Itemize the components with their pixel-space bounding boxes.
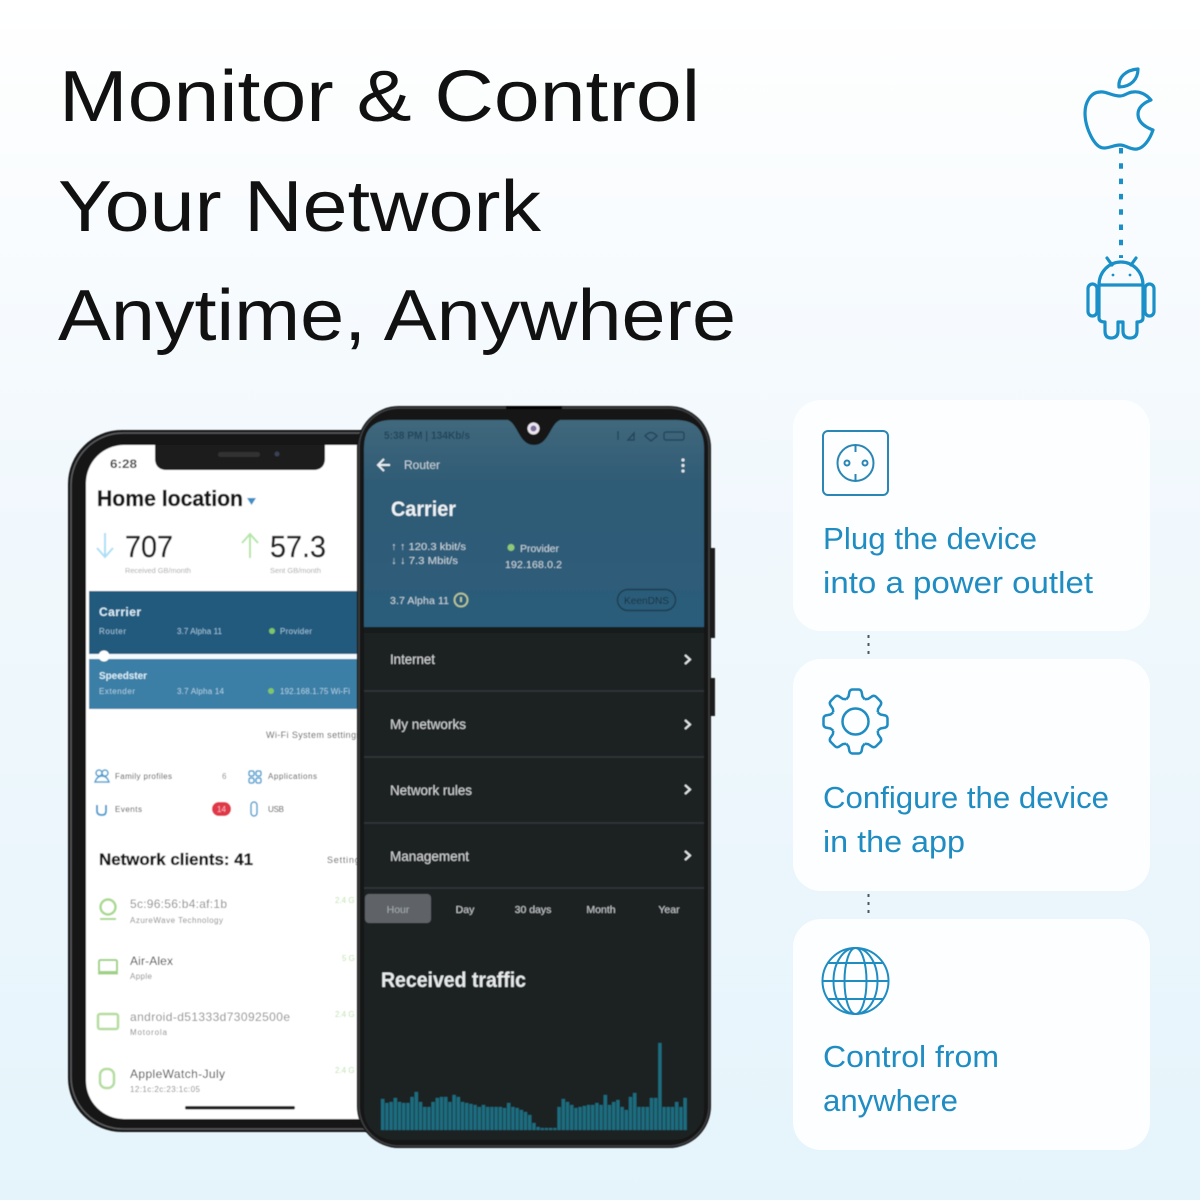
status bar [384, 430, 684, 442]
icon: events [97, 805, 106, 815]
menu tiles: Family profiles [115, 772, 172, 781]
client: android device: Motorola [130, 1028, 168, 1037]
panel: router header [364, 420, 704, 627]
client: android device: 2.4 G [335, 1010, 355, 1019]
icon: applications [249, 771, 261, 783]
menu tiles: 6 [222, 772, 227, 781]
back arrow [378, 459, 390, 471]
menu tiles: Events [115, 805, 142, 814]
client: Air-Alex [98, 954, 355, 981]
received stat: Received GB/month [125, 568, 191, 575]
panel: Carrier router [89, 591, 389, 654]
step text: into a power outlet [823, 565, 1093, 600]
KeenDNS pill [618, 590, 676, 610]
client: Air-Alex: Air-Alex [130, 954, 173, 968]
client: AppleWatch: AppleWatch-July [130, 1067, 225, 1081]
client: Air-Alex: 5 G [342, 954, 355, 963]
client: android device: android-d51333d73092500e [130, 1010, 290, 1024]
received stat: 707 [125, 529, 173, 564]
KeenDNS pill: KeenDNS [624, 596, 669, 607]
menu list [364, 627, 704, 888]
speaker [506, 406, 562, 409]
title: Your Network [58, 167, 542, 247]
panel: Speedster extender: Extender [99, 687, 135, 696]
client: AzureWave: 5c:96:56:b4:af:1b [130, 897, 227, 911]
sent stat [242, 529, 326, 575]
panel: control [793, 919, 1150, 1150]
menu item: Internet [390, 651, 690, 667]
panel: Speedster extender [89, 659, 389, 709]
badge: events count: 14 [217, 805, 226, 814]
screen dark area [364, 420, 704, 1140]
menu item: My networks [390, 716, 690, 732]
panel: Carrier router: Router [99, 627, 126, 636]
step text: Control from [823, 1039, 999, 1074]
phone: iOS app home screen [68, 430, 488, 1132]
notch with camera [508, 420, 560, 445]
title: Monitor & Control [59, 57, 700, 137]
provider status: Provider [520, 543, 560, 555]
traffic speeds: ↓ ↓ 7.3 Mbit/s [391, 555, 458, 567]
icon: apple [1085, 69, 1153, 149]
notch [155, 445, 325, 470]
phone body [357, 406, 711, 1148]
badge: events count [212, 802, 231, 816]
side buttons [711, 548, 715, 716]
sent stat: Sent GB/month [270, 568, 321, 575]
bar chart: received traffic [381, 1043, 687, 1130]
status bar: 5:38 PM | 134Kb/s [384, 430, 470, 442]
phone: Android app router screen [357, 406, 715, 1148]
link line [89, 650, 389, 662]
panel: configure [793, 659, 1150, 891]
status bar time: 6:28 [110, 457, 137, 471]
phone body [68, 430, 488, 1132]
client: AppleWatch: 12:1c:2c:23:1c:05 [130, 1085, 201, 1094]
panel: Speedster extender: 192.168.1.75 Wi-Fi [280, 687, 350, 696]
panel: Carrier router: 3.7 Alpha 11 [177, 627, 223, 636]
traffic speeds [391, 541, 466, 567]
period tabs [365, 894, 680, 923]
client: Air-Alex: Apple [130, 972, 153, 981]
icon: family [95, 770, 109, 782]
heading: Home location: Home location [97, 486, 243, 511]
icon: USB [251, 802, 257, 816]
menu item: Network rules: Network rules [390, 782, 472, 798]
camera [218, 452, 280, 457]
panel: Carrier router: Carrier [99, 605, 141, 619]
client: AzureWave: AzureWave Technology [130, 916, 223, 925]
title: Anytime, Anywhere [58, 276, 736, 356]
icon: globe [822, 948, 888, 1014]
icon: android [1088, 258, 1154, 338]
panel: Speedster extender: 3.7 Alpha 14 [177, 687, 225, 696]
firmware version: 3.7 Alpha 11 [390, 595, 449, 607]
heading: Received traffic: Received traffic [381, 969, 526, 992]
heading: Network clients: Network clients: 41 [99, 850, 253, 869]
panel: Speedster extender: Speedster [99, 671, 147, 682]
menu item: Management: Management [390, 848, 469, 864]
step text [823, 780, 1109, 859]
panel: Carrier router: Provider [280, 627, 312, 636]
step text [823, 1039, 999, 1118]
icon: power socket [823, 431, 888, 495]
Wi-Fi settings link: Wi-Fi System settings [266, 730, 362, 740]
provider status: 192.168.0.2 [505, 559, 562, 571]
received stat [97, 529, 191, 575]
step text: anywhere [823, 1083, 958, 1118]
dotted connector [1119, 148, 1123, 258]
period tabs: Hour [387, 904, 410, 916]
traffic speeds: ↑ ↑ 120.3 kbit/s [391, 541, 466, 553]
title [58, 57, 736, 356]
step text: Configure the device [823, 780, 1109, 815]
client: AzureWave [100, 896, 355, 925]
step text: Plug the device [823, 521, 1037, 556]
heading: Carrier: Carrier [391, 498, 456, 521]
period tabs: Year [658, 904, 680, 916]
step text: in the app [823, 824, 965, 859]
menu tiles: Applications [268, 772, 317, 781]
period tabs: Day [456, 904, 475, 916]
provider status [505, 543, 562, 571]
period tabs: Month [586, 904, 616, 916]
client: AppleWatch [100, 1066, 355, 1094]
icon: apple and android platforms [1085, 69, 1154, 338]
overflow menu [681, 458, 685, 473]
connector dashes between cards [868, 627, 870, 915]
menu tiles: USB [268, 805, 284, 814]
menu item: Network rules [390, 782, 690, 798]
step text [823, 521, 1093, 600]
menu item: Management [390, 848, 690, 864]
screen label: Router: Router [404, 458, 440, 472]
screen [86, 445, 476, 1119]
dropdown marker [247, 498, 256, 505]
sent stat: 57.3 [270, 529, 326, 564]
firmware version [390, 594, 468, 607]
client list [98, 896, 355, 1094]
icon: gear [824, 690, 888, 754]
client: AzureWave: 2.4 G [335, 896, 355, 905]
menu item: Internet: Internet [390, 651, 435, 667]
menu tiles [95, 770, 317, 816]
home indicator [185, 1106, 295, 1110]
client: android device [98, 1010, 355, 1037]
panel: plug in [793, 400, 1150, 631]
client: AppleWatch: 2.4 G [335, 1066, 355, 1075]
settings link: Settings [327, 855, 366, 865]
period tabs: 30 days [515, 904, 551, 916]
menu item: My networks: My networks [390, 716, 466, 732]
